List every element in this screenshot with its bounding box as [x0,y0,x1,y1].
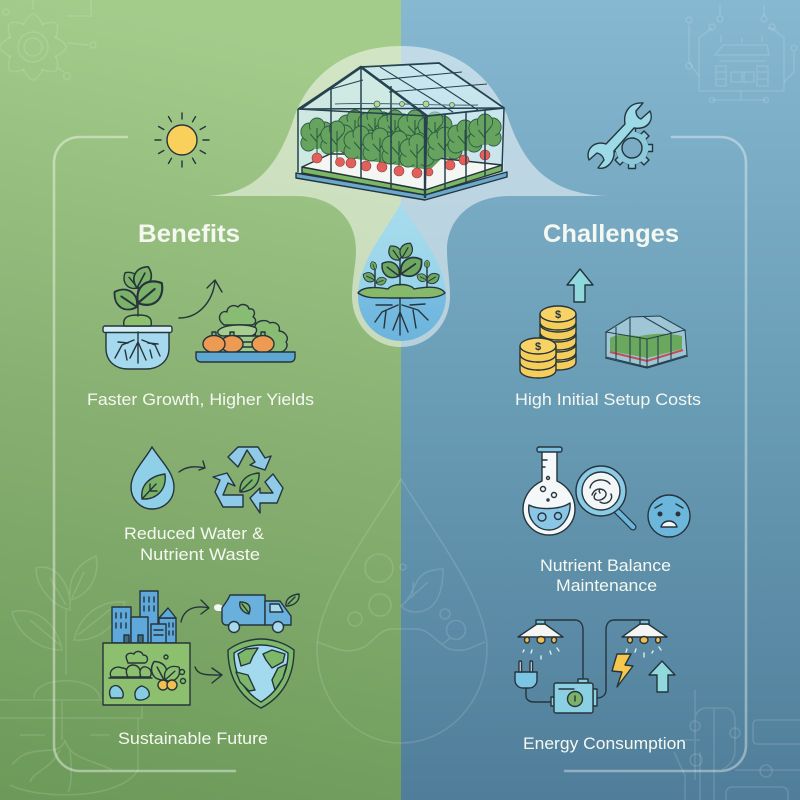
icon: plant in water pot [103,263,172,369]
dollar sign on large stack: $ [555,309,561,321]
arrow: to delivery truck [181,600,209,622]
drop plant roots [375,298,428,335]
panel: challenges background [401,0,800,800]
gear [612,128,652,168]
greenhouse frame and roof [298,63,504,198]
wires [526,620,644,702]
greenhouse plants [301,108,501,172]
truck body [222,594,299,632]
leafy greens [218,305,287,352]
drop plant leaves [361,240,442,287]
caption: nutrient balance line 1: Nutrient Balance [540,556,671,575]
left lamp [518,620,563,644]
dollar sign on small stack: $ [535,341,541,353]
icon: magnifying glass [576,466,633,527]
background art: plant with roots in pot [0,556,142,795]
central funnel shape [205,46,610,347]
caption: reduced water line 1: Reduced Water & [124,524,265,543]
control box [551,679,597,713]
background art: central water drop [317,479,487,743]
background art: bottom-right circuit [674,690,800,800]
icon: coin stacks [520,306,576,378]
small greenhouse plants [610,334,682,358]
energy up arrow [649,661,675,692]
icon: water drop with leaf [131,447,174,509]
light rays [523,647,661,659]
pot rim [103,326,172,332]
heading: Benefits: Benefits [138,220,240,248]
arrow: to recycling [179,461,205,472]
plant leaves [109,263,169,316]
icon: recycling arrows with leaf [213,447,283,513]
icon: delivery truck [214,594,299,632]
icon: city and farm [103,591,190,705]
arrow: growth [179,280,222,318]
caption: energy consumption: Energy Consumption [523,734,686,753]
wrench [588,103,651,168]
greenhouse tomatoes [312,150,490,178]
icon: worried face [648,495,690,537]
background art: gear and circuit [0,0,96,80]
soil band [358,284,445,298]
central water drop with plant [358,203,446,341]
caption: high setup costs: High Initial Setup Costs [515,390,701,409]
icon: chemistry flask [523,447,575,535]
caption: nutrient balance line 2: Maintenance [556,576,657,595]
right lamp [622,620,667,644]
farm plot [103,643,190,705]
arrow: to earth shield [195,667,222,683]
tray [196,352,295,362]
greenhouse hanging sprinklers [374,101,454,108]
greenhouse glass body [298,63,504,195]
icon: wrench and gear [588,103,652,168]
bulb [124,315,151,326]
lightning bolt [612,654,633,687]
power plug [515,672,537,688]
caption: reduced water line 2: Nutrient Waste [140,545,260,564]
heading: Challenges: Challenges [543,220,679,248]
roots [115,332,160,363]
icon: earth in shield [228,639,294,708]
city buildings [112,591,176,643]
caption: faster growth: Faster Growth, Higher Yields [87,390,314,409]
greenhouse illustration [296,63,507,200]
background art: greenhouse circuit [686,5,797,102]
left rounded frame [54,137,235,771]
pumpkins [203,332,274,352]
icon: sun [155,113,209,167]
icon: grow lights and power [515,620,675,713]
small greenhouse frame [605,316,688,368]
icon: cost up arrow [567,269,593,302]
greenhouse floor [296,154,507,200]
icon: vegetables on tray [196,305,295,362]
small greenhouse icon [605,316,688,368]
smoke [214,604,226,611]
right rounded frame [565,137,746,771]
water drop background [358,203,446,341]
pot bowl [106,331,169,369]
caption: sustainable future: Sustainable Future [118,729,268,748]
panel: benefits background [0,0,401,800]
